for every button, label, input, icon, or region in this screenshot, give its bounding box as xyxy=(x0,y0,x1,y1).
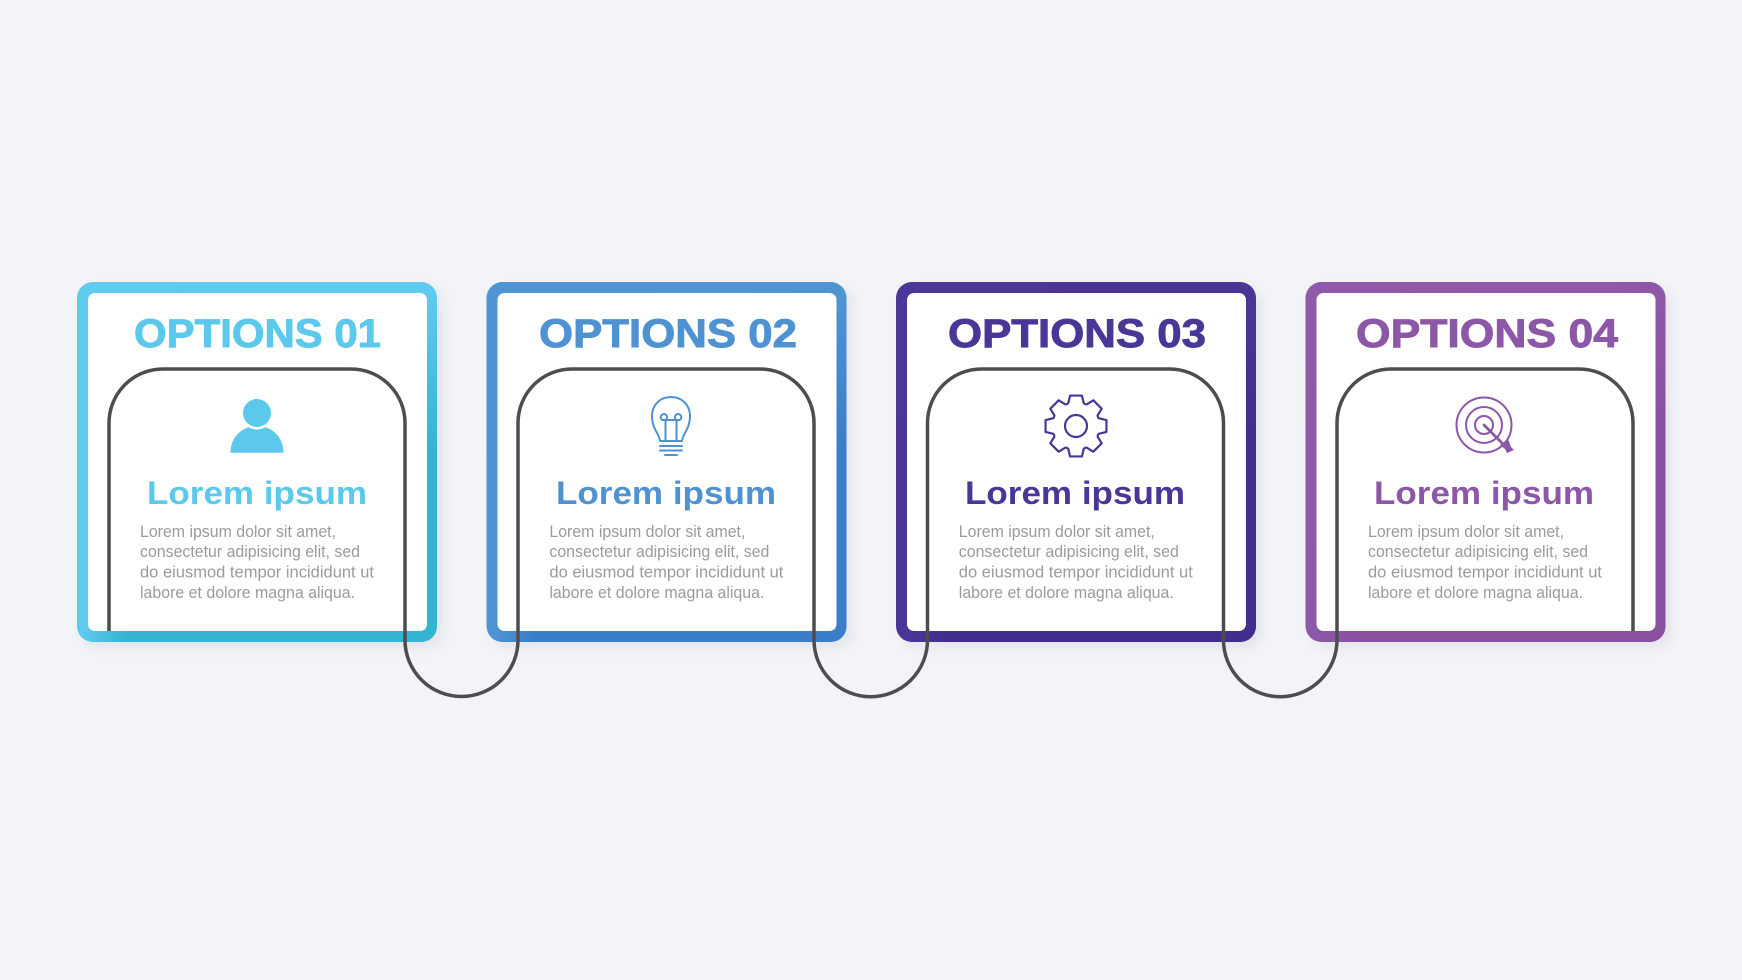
text block: options 02: labore et dolore magna aliqua. xyxy=(549,584,764,602)
panel: options 03 xyxy=(896,282,1262,648)
text block: options 03: do eiusmod tempor incididunt ut xyxy=(959,564,1193,582)
heading: options 03: OPTIONS 03 xyxy=(948,312,1206,356)
panel: options 02 xyxy=(486,282,852,648)
panel: options 01 xyxy=(77,282,443,648)
text block: options 02: do eiusmod tempor incididunt ut xyxy=(549,564,784,582)
icon: target with arrow xyxy=(1456,398,1514,453)
text block: options 01: labore et dolore magna aliqua. xyxy=(140,584,355,602)
text block: options 02: consectetur adipisicing elit, sed xyxy=(549,543,769,561)
heading: options 04: OPTIONS 04 xyxy=(1356,312,1619,356)
text block: options 04: consectetur adipisicing elit, sed xyxy=(1368,543,1588,561)
connector line linking all panels xyxy=(109,369,1633,697)
text block: options 01: do eiusmod tempor incididunt ut xyxy=(140,564,374,582)
icon: gear xyxy=(1046,396,1106,456)
text block: options 02: Lorem ipsum dolor sit amet, xyxy=(549,523,745,541)
text block: options 03: consectetur adipisicing elit, sed xyxy=(959,543,1179,561)
subheading: options 04: Lorem ipsum xyxy=(1374,475,1594,511)
subheading: options 03: Lorem ipsum xyxy=(965,475,1185,511)
text block: options 01 xyxy=(140,523,374,602)
text block: options 03 xyxy=(959,523,1193,602)
text block: options 01: consectetur adipisicing elit, sed xyxy=(140,543,360,561)
text block: options 01: Lorem ipsum dolor sit amet, xyxy=(140,523,336,541)
subheading: options 02: Lorem ipsum xyxy=(556,475,776,511)
text block: options 03: Lorem ipsum dolor sit amet, xyxy=(959,523,1155,541)
text block: options 04: Lorem ipsum dolor sit amet, xyxy=(1368,523,1564,541)
heading: options 01: OPTIONS 01 xyxy=(134,312,381,356)
subheading: options 01: Lorem ipsum xyxy=(147,475,367,511)
text block: options 04: do eiusmod tempor incididunt ut xyxy=(1368,564,1602,582)
icon: person xyxy=(230,396,284,453)
panel: options 04 xyxy=(1306,282,1672,648)
text block: options 04: labore et dolore magna aliqua. xyxy=(1368,584,1583,602)
text block: options 02 xyxy=(549,523,784,602)
icon: light bulb xyxy=(652,397,690,455)
text block: options 04 xyxy=(1368,523,1602,602)
text block: options 03: labore et dolore magna aliqua. xyxy=(959,584,1174,602)
heading: options 02: OPTIONS 02 xyxy=(539,312,797,356)
